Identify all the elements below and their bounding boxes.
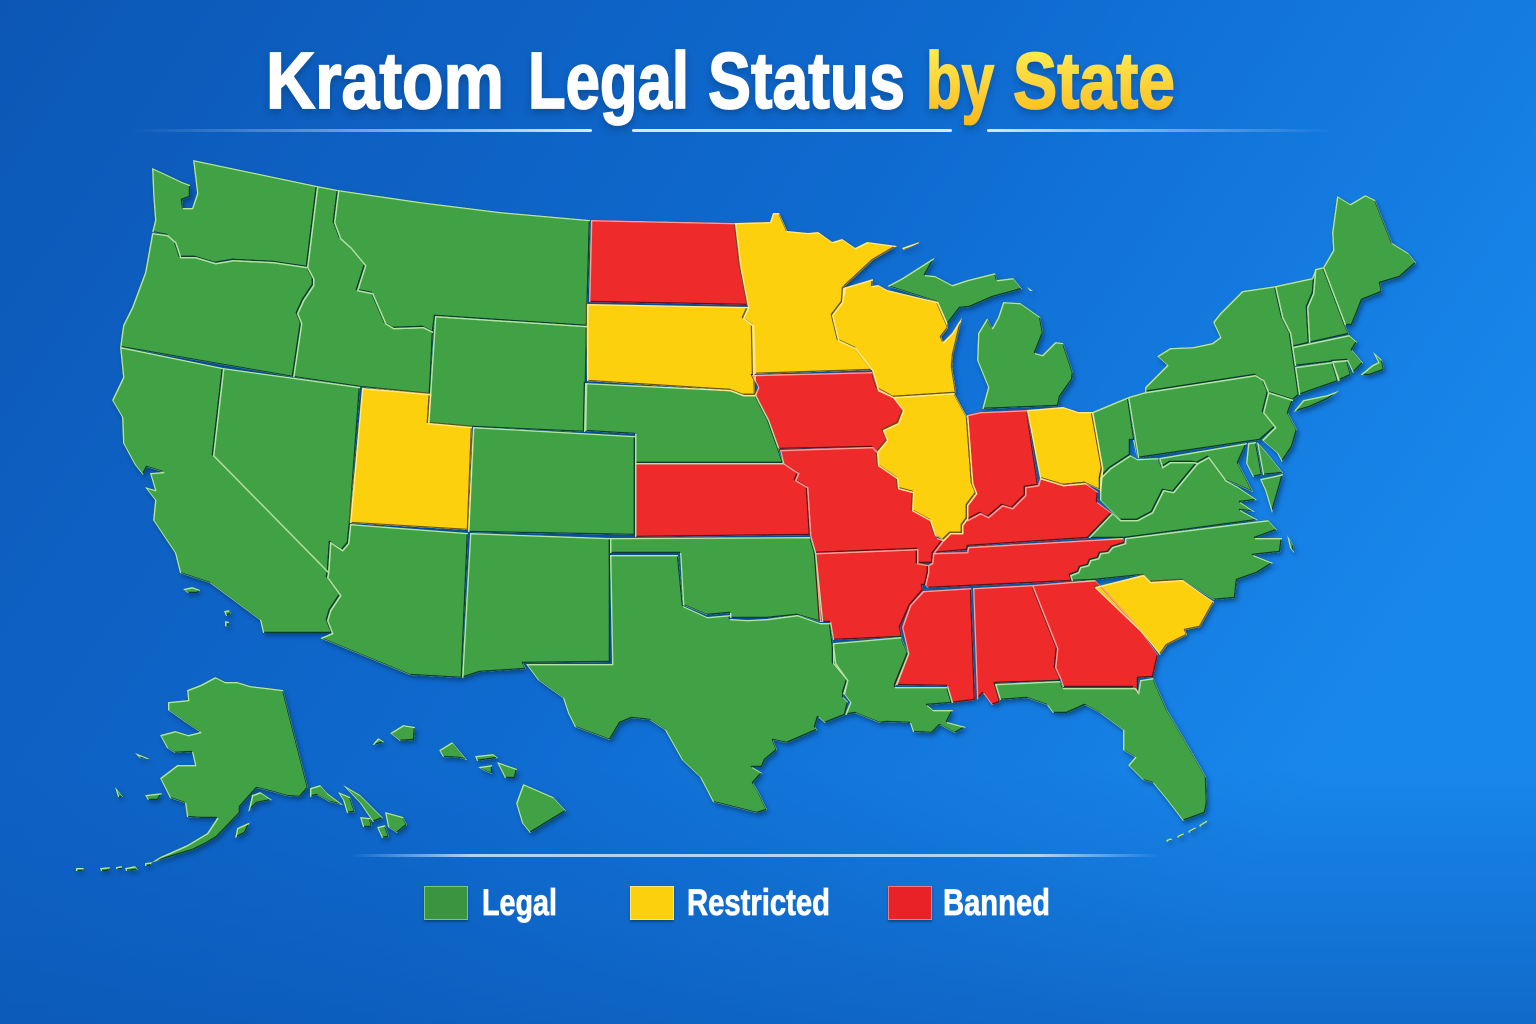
title: State [1013, 36, 1175, 125]
banned states [589, 220, 1158, 705]
legend [424, 882, 1050, 923]
title: Legal [528, 36, 689, 125]
Hawaii [372, 725, 566, 833]
legal states [76, 160, 1416, 871]
map of US states [75, 159, 1417, 872]
legend: banned [888, 882, 1050, 923]
legend: restricted [630, 882, 830, 923]
title [266, 36, 1175, 125]
restricted states [350, 213, 1214, 655]
title: Status [708, 36, 905, 125]
title: by [926, 36, 994, 125]
title underline [130, 129, 1332, 132]
Alaska [76, 677, 407, 871]
state border shading [75, 159, 1417, 872]
legend divider [350, 854, 1160, 857]
state fills [76, 160, 1416, 871]
title: Kratom [266, 36, 504, 125]
legend: legal [424, 882, 557, 923]
legend: banned: Banned [943, 882, 1050, 923]
legend: legal: Legal [482, 882, 557, 923]
legend: restricted: Restricted [687, 882, 830, 923]
